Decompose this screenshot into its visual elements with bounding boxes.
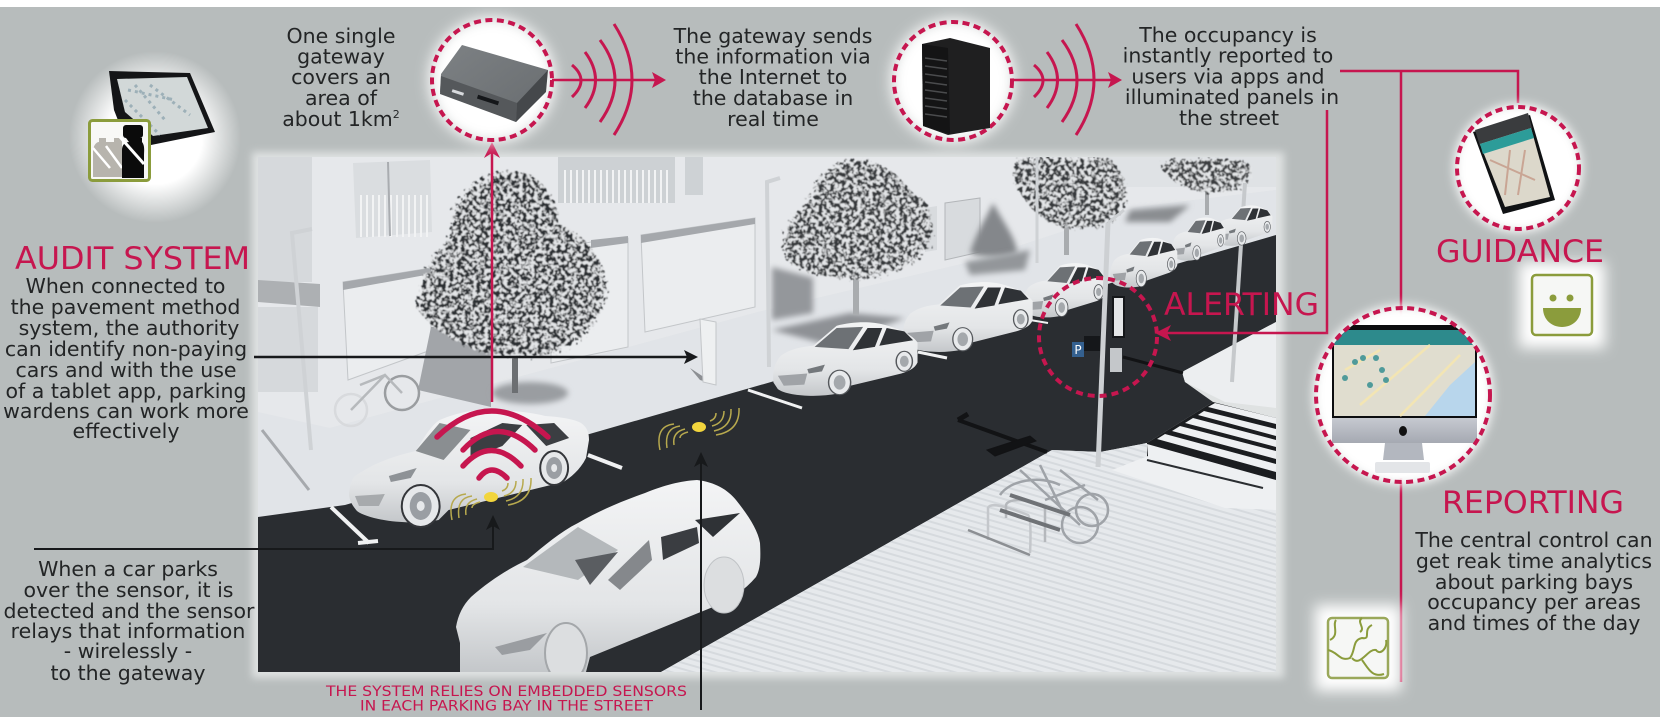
text: audit system description: can identify non-paying — [5, 337, 247, 361]
text: occupancy report: illuminated panels in — [1125, 85, 1339, 109]
tablet icon with warden badge — [69, 51, 241, 223]
text: gateway coverage: One single — [287, 24, 395, 48]
icon: smiley — [1519, 262, 1605, 348]
bicycle — [335, 375, 419, 426]
corner pavement — [1182, 322, 1276, 408]
text: reporting description: and times of the day — [1428, 611, 1640, 635]
text: reporting description: about parking bays — [1435, 570, 1633, 594]
main parked car — [349, 410, 589, 527]
text: sensor description: detected and the sensor — [4, 599, 255, 623]
text: gateway sends: real time — [727, 107, 819, 131]
text: sensor description: relays that information — [11, 619, 245, 643]
server circle — [891, 19, 1015, 143]
text: gateway sends: the database in — [693, 86, 853, 110]
arrow: audit line to meter — [254, 350, 698, 364]
heading: audit system: AUDIT SYSTEM — [15, 241, 250, 277]
text: sensor description: When a car parks — [38, 557, 218, 581]
text: occupancy report — [1123, 23, 1339, 130]
connector: reporting tail — [1400, 478, 1402, 682]
sign pole with parking panel: P — [1074, 343, 1082, 357]
sensor: free bay — [659, 408, 739, 450]
text: gateway coverage: about 1km — [282, 107, 393, 131]
parking meter — [690, 319, 716, 385]
sensor: occupied bay — [451, 478, 531, 520]
caption: embedded sensors — [325, 684, 687, 714]
arrow with radio waves 2 — [1012, 24, 1122, 135]
text: sensor description — [4, 557, 255, 685]
icon: warden badge — [90, 120, 150, 180]
text: audit system description: cars and with the use — [16, 358, 236, 382]
connector lines to outputs — [1340, 71, 1518, 316]
text: sensor description: - wirelessly - — [64, 639, 192, 663]
arrow: sensor line — [34, 515, 500, 549]
text: audit system description: When connected to — [26, 274, 225, 298]
text: reporting description: occupancy per areas — [1427, 590, 1641, 614]
trees — [512, 355, 518, 393]
caption: embedded sensors: THE SYSTEM RELIES ON EMBEDDED SENSORS — [325, 684, 687, 700]
tree 4 — [1160, 159, 1251, 193]
icon: gateway device — [440, 45, 548, 122]
bike rack — [968, 465, 1108, 555]
alerting circle — [1039, 278, 1157, 396]
shadow on road — [958, 357, 1183, 456]
building details — [258, 157, 312, 282]
icon: smartphone — [1473, 113, 1555, 214]
arrow: system line — [694, 452, 708, 710]
parked cars — [1222, 206, 1272, 246]
text: gateway sends — [673, 24, 872, 131]
text: occupancy report: users via apps and — [1131, 64, 1325, 88]
text: reporting description: The central control can — [1414, 528, 1653, 552]
panel: street scene — [258, 157, 1276, 683]
tree 2 — [784, 160, 932, 279]
text: reporting description: get reak time analytics — [1416, 549, 1652, 573]
lamp posts — [292, 157, 1245, 450]
tree 3 — [1014, 158, 1126, 229]
crosswalk — [1112, 402, 1276, 510]
icon: server tower — [922, 38, 990, 135]
icon: puzzle — [1315, 605, 1401, 691]
text: reporting description — [1414, 528, 1653, 635]
tree shadows — [418, 323, 491, 407]
text: gateway coverage — [282, 24, 400, 131]
sidewalk — [258, 190, 1276, 517]
parking bay lines — [262, 320, 1048, 543]
text: audit system description: effectively — [73, 419, 179, 443]
road — [258, 235, 1276, 672]
text: gateway coverage: gateway — [297, 44, 385, 68]
phone circle — [1454, 104, 1582, 232]
heading: guidance: GUIDANCE — [1436, 234, 1604, 270]
caption: embedded sensors: IN EACH PARKING BAY IN THE STREET — [360, 698, 653, 714]
text: occupancy report: The occupancy is — [1138, 23, 1317, 47]
heading: reporting: REPORTING — [1442, 485, 1624, 521]
monitor circle — [1313, 305, 1493, 485]
gateway circle — [429, 17, 555, 143]
building wall — [258, 157, 1276, 428]
text: sensor description: to the gateway — [51, 661, 205, 685]
text: audit system description: of a tablet app, parking — [5, 379, 247, 403]
text: sensor description: over the sensor, it is — [24, 578, 234, 602]
text: occupancy report: instantly reported to — [1123, 44, 1333, 68]
arrow with radio waves 1 — [552, 24, 666, 135]
text: gateway coverage: area of — [305, 86, 378, 110]
icon: tablet — [109, 71, 215, 146]
text: audit system description: wardens can work more — [3, 399, 249, 423]
photo glow — [252, 152, 1284, 678]
sign pole with parking panel — [1072, 210, 1124, 467]
text: gateway sends: the Internet to — [699, 65, 847, 89]
text: audit system description: system, the authority — [19, 316, 239, 340]
text: audit system description — [3, 274, 249, 443]
paved sidewalk bottom right — [661, 443, 1276, 672]
text: gateway sends: The gateway sends — [673, 24, 872, 48]
icon: desktop computer — [1332, 325, 1477, 473]
text: gateway coverage: covers an — [291, 65, 391, 89]
wifi arcs on car — [437, 411, 548, 478]
text: audit system description: the pavement method — [11, 295, 240, 319]
text: occupancy report: the street — [1179, 106, 1279, 130]
text: gateway sends: the information via — [675, 44, 871, 68]
text: gateway coverage: 2 — [393, 108, 400, 121]
foreground car — [456, 480, 760, 683]
heading: alerting: ALERTING — [1164, 287, 1319, 323]
garage doors — [343, 268, 431, 380]
arrow: sensor up to gateway — [484, 142, 500, 402]
arrow: to alerting panel — [1155, 110, 1327, 341]
tree 1 — [418, 172, 606, 358]
